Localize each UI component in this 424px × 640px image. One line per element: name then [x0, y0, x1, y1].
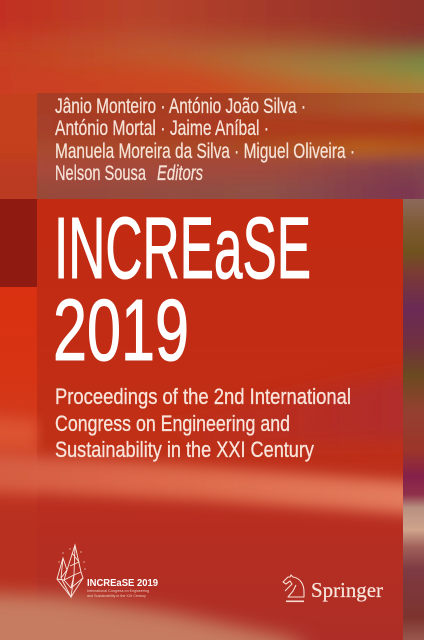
- subtitle: Congress on Engineering and: [55, 411, 290, 436]
- congress logo: [57, 545, 158, 598]
- authors: Jânio Monteiro · António João Silva ·: [55, 95, 306, 118]
- springer wordmark: Springer: [311, 578, 383, 602]
- logo tagline: and Sustainability in the XXI Century: [87, 594, 146, 598]
- left strip top: [0, 94, 37, 199]
- panel: title block: [37, 199, 403, 640]
- authors: Nelson Sousa: [55, 162, 146, 185]
- springer logo: [283, 575, 383, 602]
- blurred light streaks: [0, 373, 403, 640]
- subtitle: Proceedings of the 2nd International: [55, 384, 351, 409]
- authors: Editors: [157, 162, 203, 185]
- right colour strip: [403, 199, 424, 640]
- icon: chess knight: [283, 575, 304, 602]
- authors: [55, 95, 355, 185]
- authors: António Mortal · Jaime Aníbal ·: [55, 117, 269, 140]
- title: [53, 200, 311, 379]
- icon: crystal mountain mesh: [57, 545, 83, 597]
- logo tagline: International Congress on Engineering: [87, 589, 149, 593]
- left colour strip: [0, 199, 37, 640]
- subtitle: Sustainability in the XXI Century: [55, 437, 315, 462]
- logo dots: [58, 548, 86, 570]
- subtitle: [55, 384, 351, 462]
- logo tagline: [87, 589, 149, 598]
- title: 2019: [53, 282, 189, 379]
- logo wordmark: INCREaSE 2019: [87, 578, 158, 589]
- panel: authors backdrop: [37, 93, 424, 199]
- background: blurred colour streaks: [0, 0, 424, 118]
- dark square accent: [0, 199, 37, 287]
